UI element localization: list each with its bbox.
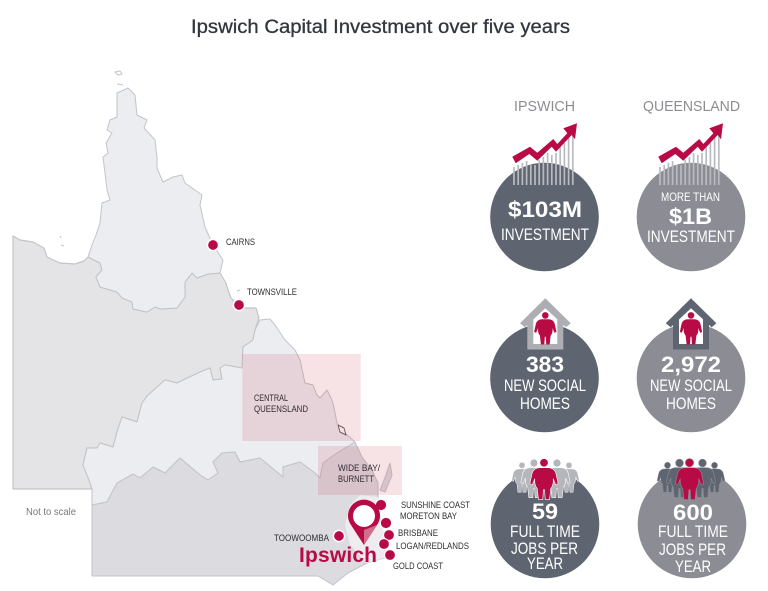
circle	[491, 470, 599, 578]
heading: ipswich: IPSWICH	[514, 98, 575, 115]
panel: queensland homes	[637, 298, 745, 432]
circle	[637, 163, 745, 271]
caption: YEAR	[675, 558, 711, 576]
panel: ipswich jobs	[491, 459, 599, 578]
region: south east	[345, 495, 387, 563]
value: $1B	[669, 204, 712, 229]
caption: INVESTMENT	[501, 226, 589, 244]
icon: arrow	[512, 123, 577, 163]
label: toowoomba: TOOWOOMBA	[274, 533, 329, 543]
icon: crowd	[657, 459, 725, 500]
icon: ipswich pin	[348, 500, 380, 545]
label: central: CENTRAL	[254, 393, 288, 403]
caption: YEAR	[527, 555, 563, 573]
dot: sunshine coast	[375, 499, 387, 511]
overlay: wide bay burnett	[318, 446, 402, 495]
caption: INVESTMENT	[647, 228, 735, 246]
dot: cairns	[207, 239, 219, 251]
caption: JOBS PER	[659, 541, 726, 559]
circle	[637, 324, 745, 432]
label: gold coast: GOLD COAST	[393, 561, 443, 571]
northern islands	[60, 71, 240, 291]
map of Queensland	[13, 71, 402, 585]
label: queensland: QUEENSLAND	[254, 404, 308, 414]
caption: JOBS PER	[511, 540, 578, 558]
label: sunshine coast: SUNSHINE COAST	[401, 500, 470, 510]
value: 59	[532, 499, 558, 524]
value: 600	[673, 500, 713, 525]
panel: ipswich investment	[490, 123, 599, 271]
panel: queensland jobs	[638, 459, 746, 578]
label: brisbane: BRISBANE	[398, 528, 438, 538]
value: 2,972	[661, 352, 721, 377]
more than: MORE THAN	[661, 192, 720, 204]
dot: moreton bay	[380, 517, 392, 529]
icon: arrow	[658, 123, 723, 163]
circle	[490, 324, 599, 432]
circle	[638, 470, 746, 578]
dot: gold coast	[385, 550, 395, 560]
small island	[338, 425, 346, 435]
region: south west and wide bay	[92, 442, 387, 585]
overlay: central queensland	[242, 354, 361, 441]
caption: HOMES	[520, 395, 570, 413]
dot: toowoomba	[333, 530, 345, 542]
value: $103M	[508, 197, 582, 222]
icon: house	[520, 298, 571, 350]
label: cairns: CAIRNS	[226, 237, 255, 247]
label: burnett: BURNETT	[338, 474, 374, 484]
region: north west	[13, 236, 259, 489]
caption: FULL TIME	[510, 523, 580, 541]
dot: townsville	[233, 299, 245, 311]
dot: brisbane	[384, 530, 394, 540]
caption: FULL TIME	[658, 523, 728, 541]
icon: bars	[514, 135, 573, 185]
label: ipswich: Ipswich	[299, 544, 377, 567]
label: logan redlands: LOGAN/REDLANDS	[396, 541, 469, 551]
icon: house	[666, 298, 716, 350]
icon: crowd	[512, 459, 579, 500]
panel: queensland investment	[637, 123, 745, 271]
caption: HOMES	[666, 395, 716, 413]
panel: ipswich homes	[490, 298, 599, 432]
label: not to scale: Not to scale	[26, 506, 76, 518]
caption: NEW SOCIAL	[504, 377, 586, 395]
value: 383	[526, 352, 564, 377]
region: central queensland	[83, 319, 355, 505]
fraser island	[380, 463, 392, 492]
label: townsville: TOWNSVILLE	[247, 287, 297, 297]
caption: NEW SOCIAL	[650, 377, 732, 395]
title: Ipswich Capital Investment over five years	[191, 17, 570, 38]
label: wide bay: WIDE BAY/	[338, 463, 380, 473]
heading: queensland: QUEENSLAND	[643, 98, 740, 115]
dot: logan redlands	[379, 539, 389, 549]
region: cape york and far north	[88, 88, 223, 312]
icon: bars	[660, 135, 719, 185]
circle	[490, 163, 599, 271]
label: moreton bay: MORETON BAY	[400, 511, 457, 521]
